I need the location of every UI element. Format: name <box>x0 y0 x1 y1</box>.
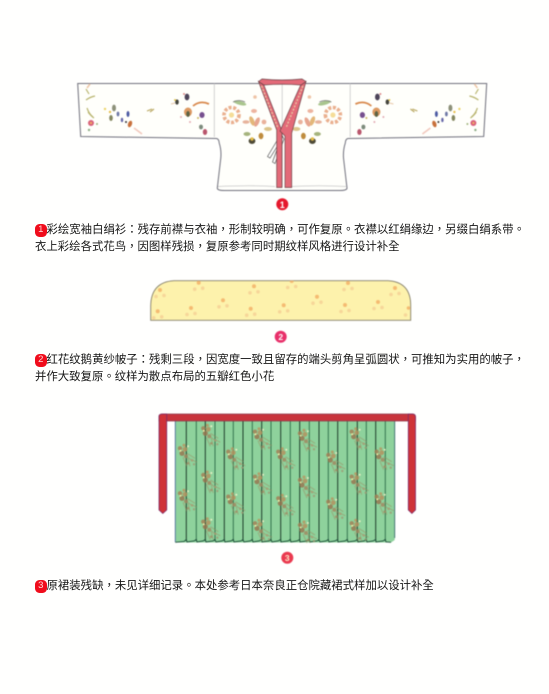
caption 1 <box>35 223 525 253</box>
caption 1: 彩绘宽袖白绢衫：残存前襟与衣袖，形制较明确，可作复原。衣襟以红绢缘边，另缀白绢系带。 <box>46 224 525 236</box>
red collar <box>258 79 306 188</box>
green skirt panel <box>175 421 395 542</box>
caption 2: 2 <box>38 354 43 365</box>
veil flower dots <box>152 279 410 320</box>
hem folds <box>175 540 391 542</box>
pleat lines <box>175 421 395 542</box>
sleeve seams and centre line <box>214 84 350 187</box>
badge 1: 1 <box>280 200 285 210</box>
collar trim <box>262 86 303 128</box>
caption 3: 原裙装残缺，未见详细记录。本处参考日本奈良正仓院藏裙式样加以设计补全 <box>46 580 434 592</box>
badge 3 <box>281 552 293 564</box>
badge 1 <box>276 198 288 210</box>
caption 2 <box>35 353 525 383</box>
caption 3: 3 <box>38 580 43 591</box>
caption 2: 并作大致复原。纹样为散点布局的五瓣红色小花 <box>35 371 274 383</box>
right tie <box>408 414 416 514</box>
caption 1: 1 <box>38 224 43 235</box>
embroidery left <box>86 84 272 144</box>
white ties <box>268 134 284 164</box>
badge 2: 2 <box>278 332 283 342</box>
badge 3: 3 <box>285 553 290 563</box>
caption 1: 衣上彩绘各式花鸟，因图样残损，复原参考同时期纹样风格进行设计补全 <box>35 241 400 253</box>
embroidery right <box>292 84 478 144</box>
caption 2: 红花纹鹅黄纱帔子：残剩三段，因宽度一致且留存的端头剪角呈弧圆状，可推知为实用的帔子， <box>46 354 525 366</box>
illustration layer <box>76 78 488 564</box>
jacket illustration <box>78 79 487 190</box>
yellow veil <box>151 279 411 320</box>
waistband <box>159 414 416 421</box>
jacket body outline <box>78 84 487 190</box>
floral motifs <box>178 424 394 543</box>
left tie <box>159 414 167 514</box>
pleated skirt <box>159 414 416 543</box>
badge 2 <box>275 331 287 343</box>
veil shape <box>151 281 411 320</box>
